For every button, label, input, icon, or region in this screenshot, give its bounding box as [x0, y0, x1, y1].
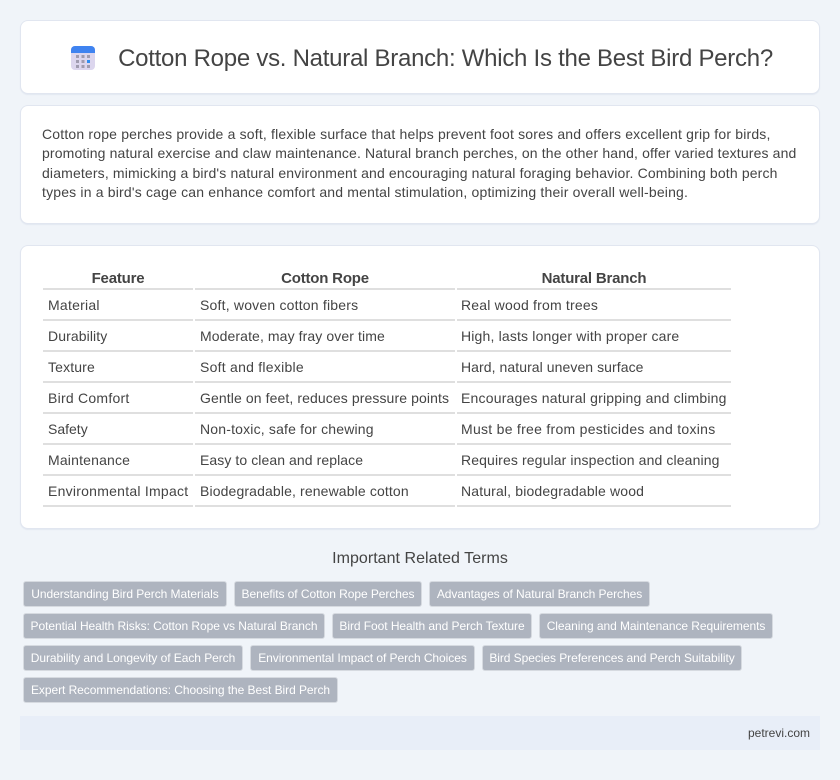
row: material: Soft, woven cotton fibers — [200, 297, 358, 313]
row: environmental impact: Biodegradable, renewable cotton — [200, 483, 409, 499]
row: environmental impact: Environmental Impact — [48, 483, 188, 499]
row: durability: Durability — [48, 328, 107, 344]
comparison table panel — [20, 245, 820, 529]
related term tags — [23, 581, 773, 703]
related term tags: Bird Species Preferences and Perch Suitability — [489, 651, 735, 665]
row: texture — [48, 359, 644, 375]
row: safety — [48, 421, 715, 437]
row: bird comfort: Gentle on feet, reduces pressure points — [200, 390, 449, 406]
header panel — [20, 20, 820, 94]
related term tags: Expert Recommendations: Choosing the Best Bird Perch — [31, 683, 330, 697]
related term tags: Advantages of Natural Branch Perches — [437, 587, 642, 601]
related term tags: Durability and Longevity of Each Perch — [31, 651, 235, 665]
row: texture: Hard, natural uneven surface — [461, 359, 644, 375]
row: durability: High, lasts longer with proper care — [461, 328, 679, 344]
row: maintenance: Requires regular inspection and cleaning — [461, 452, 720, 468]
row: maintenance — [48, 452, 720, 468]
table header: Cotton Rope — [281, 270, 369, 287]
title: Cotton Rope vs. Natural Branch: Which Is the Best Bird Perch? — [118, 45, 773, 72]
related term tags: Bird Foot Health and Perch Texture — [339, 619, 525, 633]
related term tags: Environmental Impact of Perch Choices — [258, 651, 467, 665]
row: material: Material — [48, 297, 100, 313]
table header — [92, 270, 646, 287]
intro text panel: promoting natural exercise and claw maintenance. Natural branch perches, on the other hand, offer varied textures and — [42, 145, 796, 161]
row: maintenance: Easy to clean and replace — [200, 452, 363, 468]
row: durability: Moderate, may fray over time — [200, 328, 385, 344]
row: safety: Non-toxic, safe for chewing — [200, 421, 374, 437]
related term tags: Benefits of Cotton Rope Perches — [242, 587, 414, 601]
row: bird comfort: Encourages natural gripping and climbing — [461, 390, 727, 406]
related term tags: Potential Health Risks: Cotton Rope vs Natural Branch — [31, 619, 317, 633]
intro text panel: types in a bird's cage can enhance comfort and mental stimulation, optimizing their overall well-being. — [42, 184, 688, 200]
intro text panel: diameters, mimicking a bird's natural environment and encouraging natural foraging behavior. Combining both perch — [42, 165, 778, 181]
table header: Feature — [92, 270, 144, 287]
row: safety: Must be free from pesticides and toxins — [461, 421, 715, 437]
footer bar — [20, 716, 820, 750]
row: material: Real wood from trees — [461, 297, 598, 313]
icon: calendar grid — [71, 46, 95, 70]
row: environmental impact: Natural, biodegradable wood — [461, 483, 644, 499]
row: material — [48, 297, 598, 313]
related term tags: Understanding Bird Perch Materials — [31, 587, 219, 601]
row: texture: Soft and flexible — [200, 359, 304, 375]
intro text panel — [20, 105, 820, 224]
related terms heading: Important Related Terms — [332, 550, 508, 567]
row: texture: Texture — [48, 359, 95, 375]
row: safety: Safety — [48, 421, 88, 437]
table header: Natural Branch — [542, 270, 646, 287]
footer source text: petrevi.com — [748, 726, 810, 740]
row: bird comfort: Bird Comfort — [48, 390, 130, 406]
row: maintenance: Maintenance — [48, 452, 130, 468]
row: environmental impact — [48, 483, 644, 499]
row: durability — [48, 328, 679, 344]
row: bird comfort — [48, 390, 727, 406]
related term tags: Cleaning and Maintenance Requirements — [547, 619, 765, 633]
intro text panel: Cotton rope perches provide a soft, flexible surface that helps prevent foot sores and offers excellent grip for birds, — [42, 126, 771, 142]
